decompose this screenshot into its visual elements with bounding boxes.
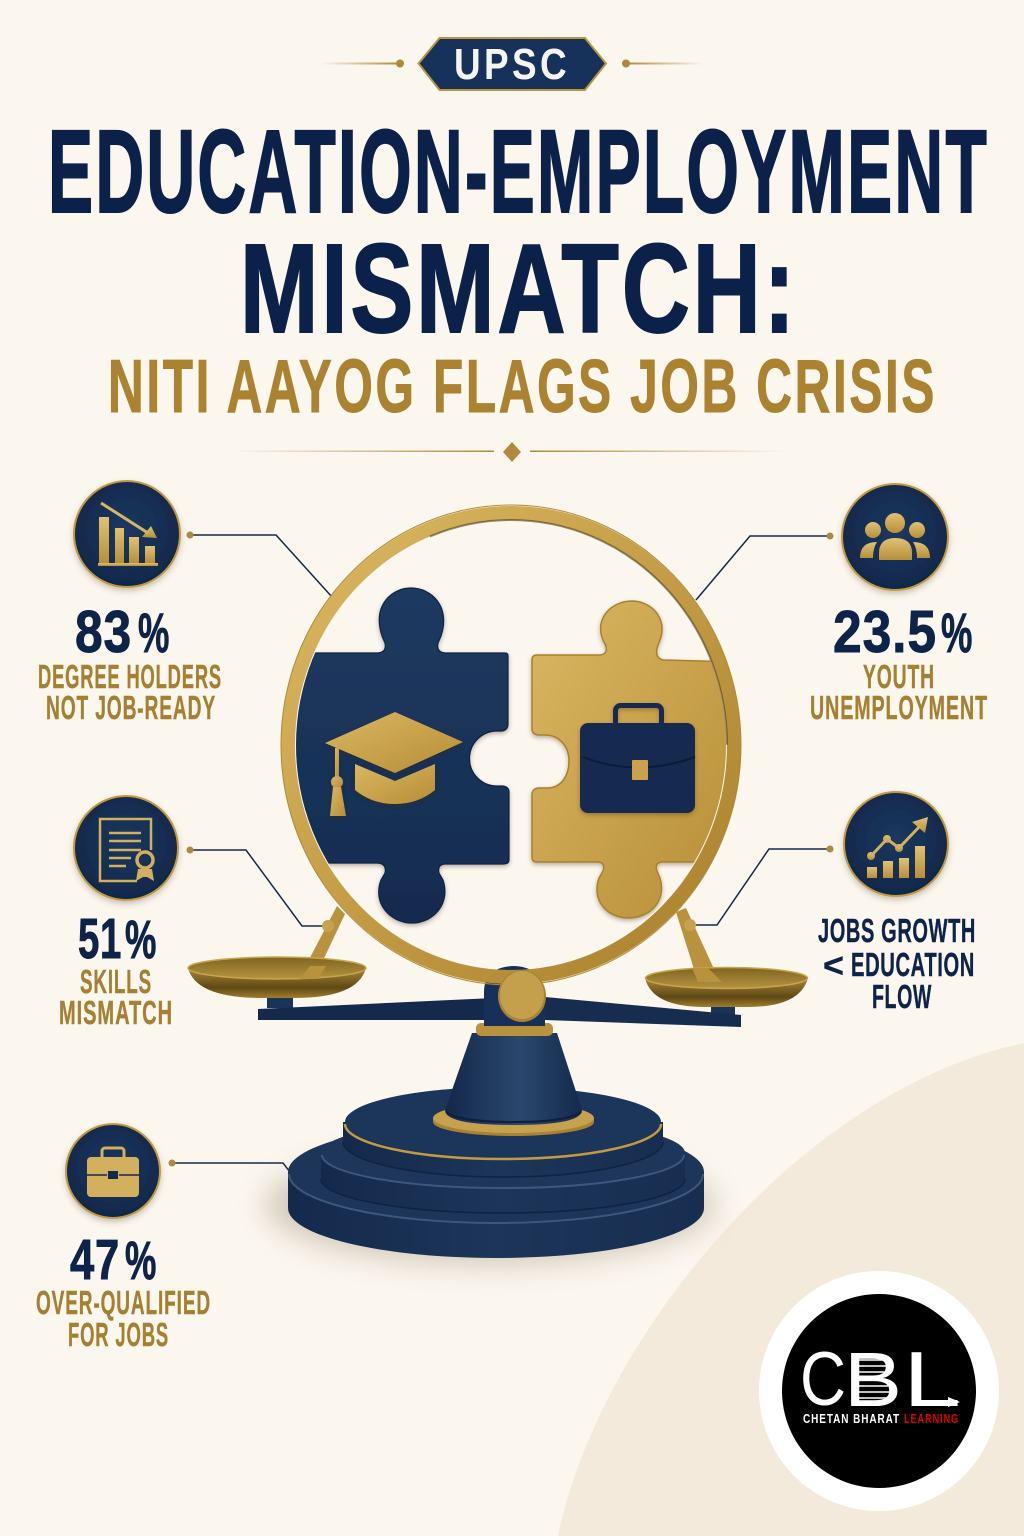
stat text: < xyxy=(823,947,845,985)
pivot disc xyxy=(498,970,546,1022)
base tier 3 xyxy=(288,1122,704,1258)
stat label xyxy=(810,658,988,726)
logo: CBL xyxy=(759,1271,999,1511)
stat value: 23.5 xyxy=(833,599,937,665)
stat label xyxy=(36,1284,211,1353)
background curve xyxy=(558,1043,1024,1536)
puzzle: education xyxy=(280,588,509,923)
stat: over-qualified xyxy=(36,1124,211,1353)
stat label: OVER-QUALIFIED xyxy=(36,1284,211,1321)
stat value: 83 xyxy=(75,599,132,665)
stat label xyxy=(38,658,222,726)
pan foot right xyxy=(711,1006,735,1016)
logo: CBL: LEARNING xyxy=(904,1411,959,1426)
UPSC badge: UPSC xyxy=(454,40,570,89)
icon: falling bar chart xyxy=(74,481,180,587)
logo: CBL: B xyxy=(844,1337,902,1423)
stat: degree holders xyxy=(38,481,222,726)
stat value: % xyxy=(125,910,157,970)
UPSC badge xyxy=(321,38,703,90)
left pan xyxy=(188,957,366,998)
stat label: NOT JOB-READY xyxy=(46,689,216,726)
puzzle: employment xyxy=(532,601,738,918)
stat: youth unemployment xyxy=(810,484,988,726)
stat label: DEGREE HOLDERS xyxy=(38,658,222,695)
stat text: FLOW xyxy=(872,978,932,1015)
top collar xyxy=(476,1023,553,1036)
cone xyxy=(445,1033,582,1125)
stat label: YOUTH xyxy=(863,658,935,695)
title xyxy=(48,106,989,428)
stat: skills mismatch xyxy=(59,796,178,1031)
logo: CBL: CHETAN BHARAT xyxy=(803,1411,900,1426)
connector lines xyxy=(174,535,828,1172)
stat label: SKILLS xyxy=(80,963,152,1000)
book page lines xyxy=(858,1360,890,1398)
ring support arms xyxy=(302,906,720,982)
stat text xyxy=(818,912,976,1015)
graduation cap xyxy=(325,712,463,816)
stat label: MISMATCH xyxy=(59,994,173,1031)
icon: briefcase badge xyxy=(66,1124,160,1218)
stat value: % xyxy=(138,601,170,664)
title: MISMATCH: xyxy=(240,218,798,359)
scale stand xyxy=(288,1023,704,1258)
logo: CBL: L xyxy=(903,1335,961,1423)
base tier 2 xyxy=(321,1119,685,1213)
pan foot left xyxy=(267,997,293,1008)
base shadow xyxy=(265,1145,715,1265)
stat value: % xyxy=(125,1231,157,1291)
gold collar xyxy=(433,1103,594,1136)
pivot post xyxy=(484,966,545,1026)
stat value: % xyxy=(941,601,973,664)
connector dots xyxy=(168,532,834,1166)
briefcase xyxy=(580,706,695,813)
stat value: 47 xyxy=(70,1228,120,1292)
stat label: FOR JOBS xyxy=(68,1316,169,1353)
icon: people xyxy=(842,484,948,590)
stat: jobs growth xyxy=(818,792,976,1015)
icon: certificate xyxy=(74,796,178,900)
base tier 1 xyxy=(343,1087,663,1177)
gold ring xyxy=(281,505,741,985)
balance beam xyxy=(258,966,741,1027)
logo: CBL: C xyxy=(800,1337,846,1422)
right pan xyxy=(645,968,808,1007)
icon: growth chart xyxy=(844,792,948,896)
puzzle pieces xyxy=(280,588,738,923)
stat label xyxy=(59,963,173,1031)
divider xyxy=(232,442,785,462)
stat value: 51 xyxy=(78,907,122,971)
